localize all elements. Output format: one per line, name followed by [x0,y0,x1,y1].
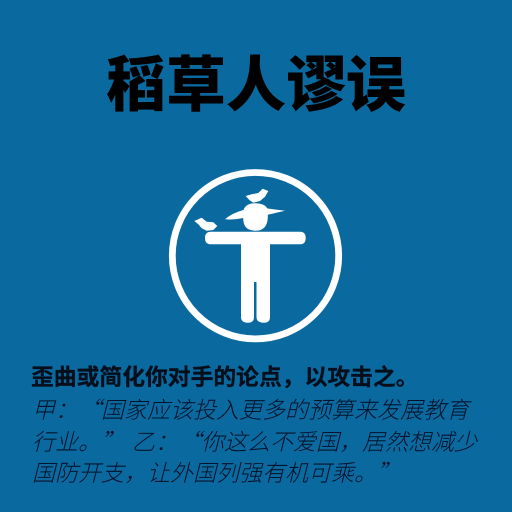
example line 1: 甲：“国家应该投入更多的预算来发展教育 [32,391,469,425]
scarecrow figure [194,189,306,323]
scarecrow head and hat [225,203,285,231]
definition: 歪曲或简化你对手的论点，以攻击之。 [31,359,419,392]
icon: scarecrow with birds in a circle [168,169,342,342]
bird on arm [194,218,217,231]
example line 2: ” [101,423,124,457]
title: 稻草人谬误 [106,37,406,124]
icon ring [172,172,339,339]
example line 3: ” [377,454,400,488]
example line 3: 国防开支，让外国列强有机可乘。 [32,454,377,488]
example line 2: 行业。 乙：“你这么不爱国，居然想减少 [32,423,477,457]
bird on hat [246,189,268,203]
